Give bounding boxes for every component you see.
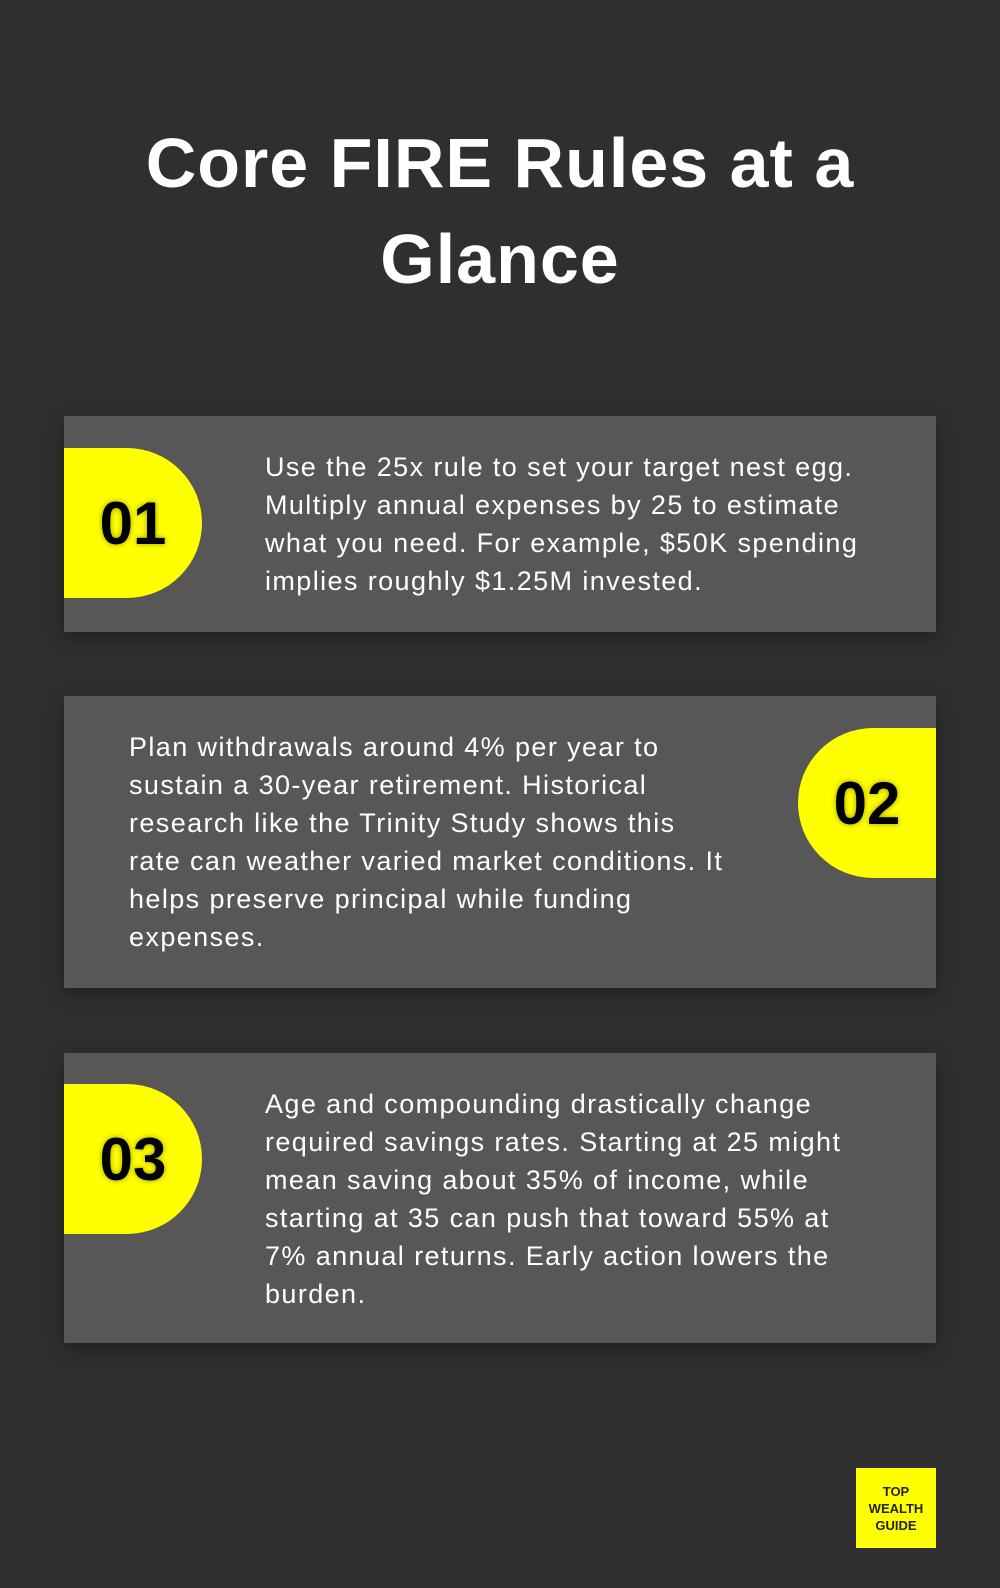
text 02: helps preserve principal while funding <box>129 884 632 914</box>
panel: rule 03 <box>64 1053 936 1343</box>
title: Core FIRE Rules at a <box>146 124 854 202</box>
panel: rule 01 <box>64 416 936 632</box>
text 01: what you need. For example, $50K spending <box>265 528 858 558</box>
badge 01: 01 <box>100 490 166 556</box>
text 03 <box>265 1089 841 1309</box>
text 01 <box>265 452 858 596</box>
text 02 <box>129 732 723 952</box>
text 03: Age and compounding drastically change <box>265 1089 812 1119</box>
text 03: 7% annual returns. Early action lowers the <box>265 1241 830 1271</box>
logo: TOP <box>883 1484 909 1498</box>
text 02: rate can weather varied market conditions. It <box>129 846 723 876</box>
text 03: mean saving about 35% of income, while <box>265 1165 809 1195</box>
text 01: implies roughly $1.25M invested. <box>265 566 703 596</box>
badge 02 <box>798 728 936 878</box>
text 03: starting at 35 can push that toward 55% at <box>265 1203 830 1233</box>
text 01: Use the 25x rule to set your target nest egg. <box>265 452 853 482</box>
text 02: sustain a 30-year retirement. Historical <box>129 770 647 800</box>
badge 02: 02 <box>834 770 900 836</box>
text 01: Multiply annual expenses by 25 to estimate <box>265 490 840 520</box>
text 02: expenses. <box>129 922 265 952</box>
badge 03: 03 <box>100 1126 166 1192</box>
logo: GUIDE <box>875 1518 917 1532</box>
text 03: burden. <box>265 1279 366 1309</box>
title: Glance <box>380 220 620 298</box>
text 02: Plan withdrawals around 4% per year to <box>129 732 659 762</box>
logo <box>856 1468 936 1548</box>
badge 01 <box>64 448 202 598</box>
logo: WEALTH <box>869 1500 923 1516</box>
text 02: research like the Trinity Study shows this <box>129 808 676 838</box>
badge 03 <box>64 1084 202 1234</box>
panel: rule 02 <box>64 696 936 988</box>
title <box>146 124 854 298</box>
text 03: required savings rates. Starting at 25 might <box>265 1127 841 1157</box>
